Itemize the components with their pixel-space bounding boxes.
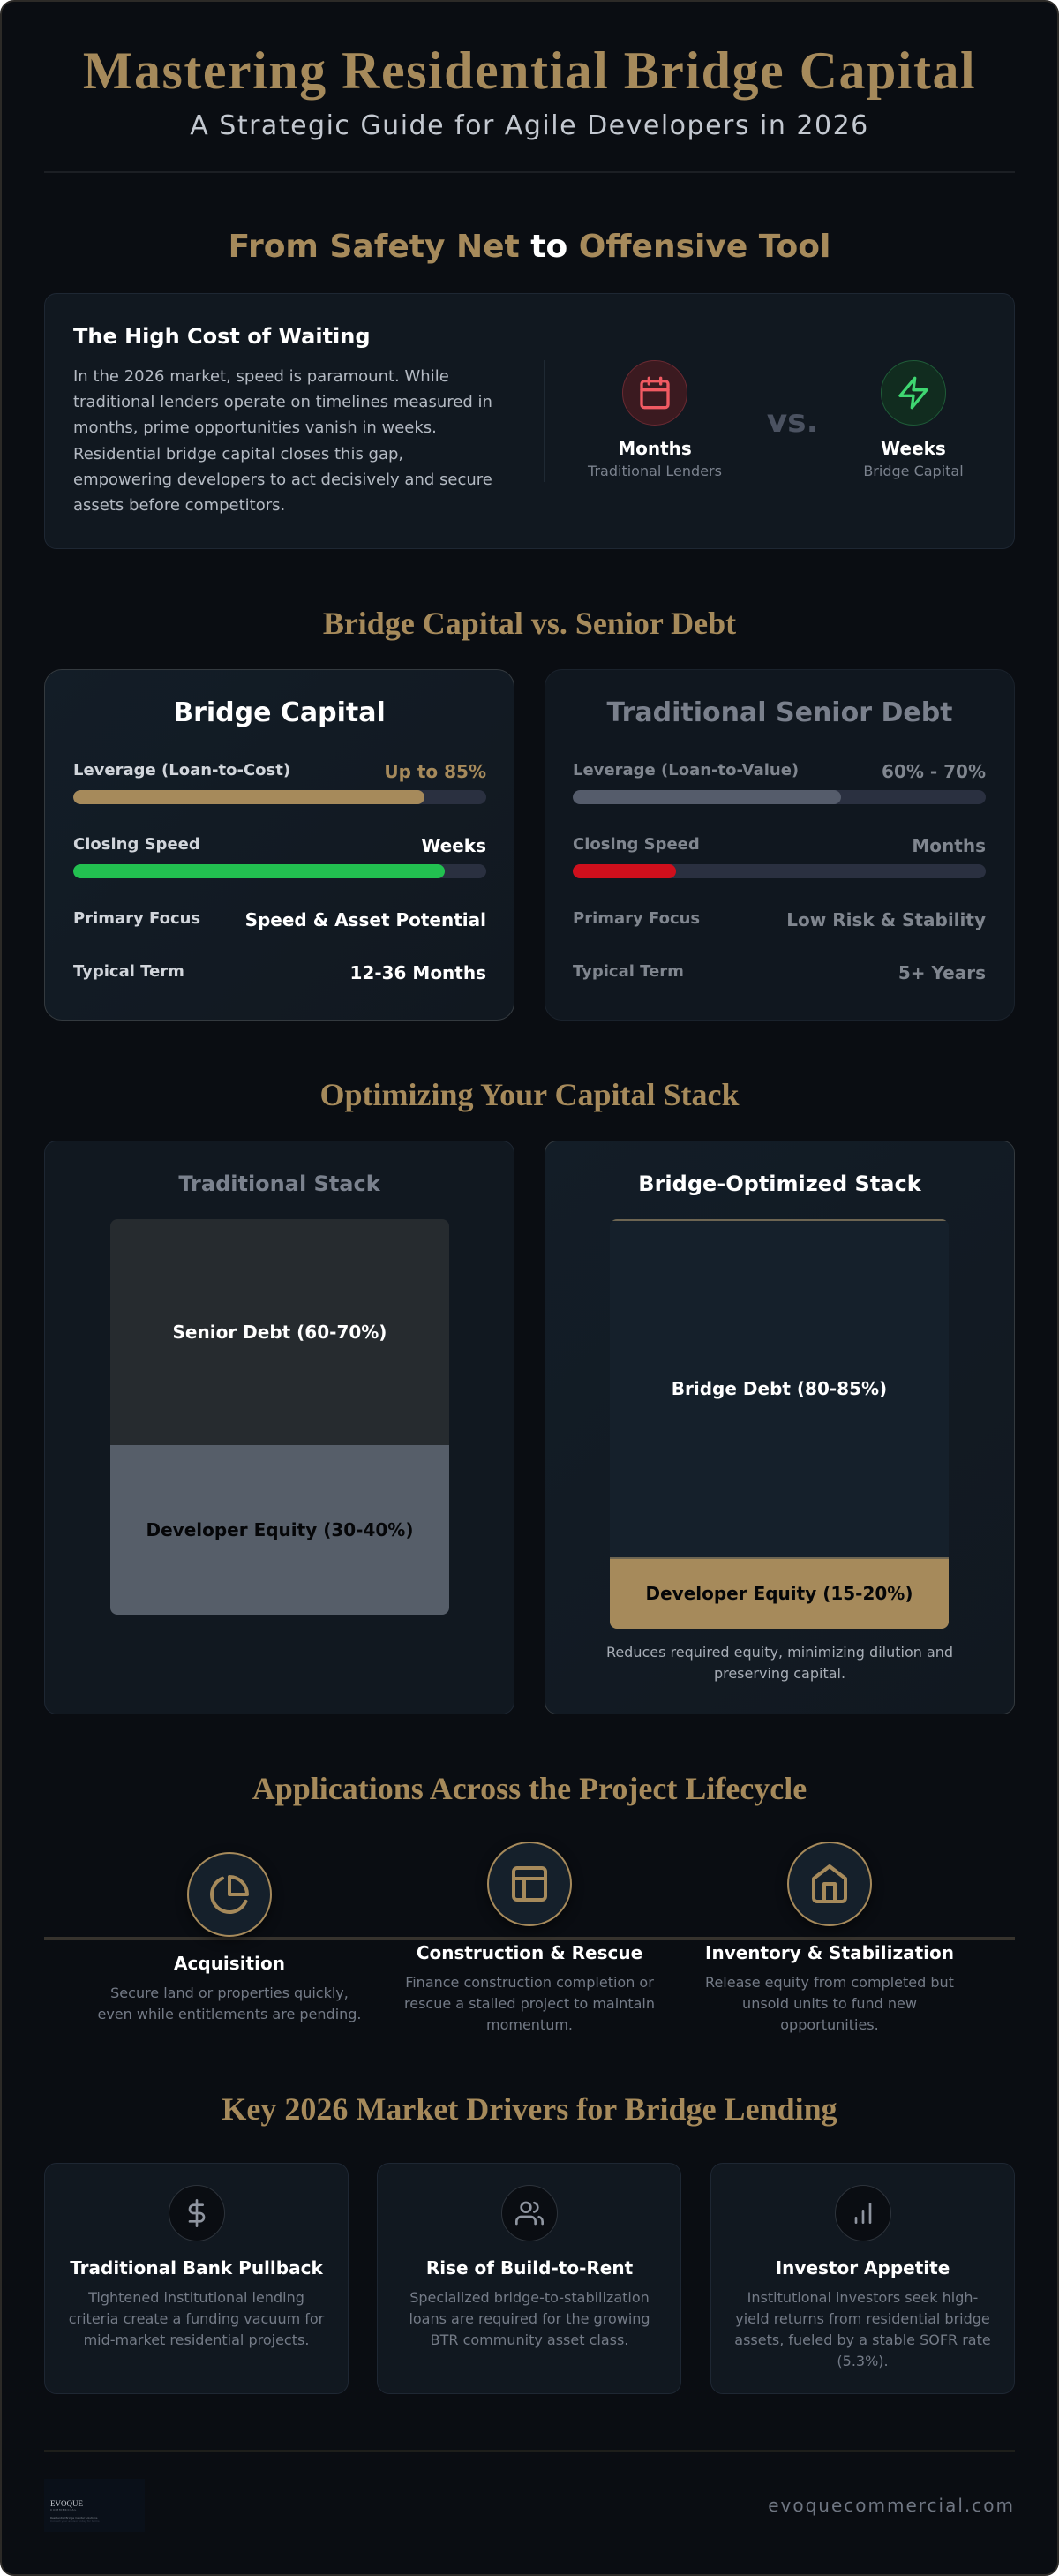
- icon: home: [787, 1842, 872, 1926]
- body text: months, prime opportunities vanish in weeks.: [73, 418, 437, 437]
- driver description: Institutional investors seek high-: [747, 2289, 978, 2306]
- typical term row: Typical Term: [73, 962, 184, 981]
- caption: preserving capital.: [714, 1665, 845, 1682]
- card heading: Traditional Senior Debt: [606, 697, 953, 728]
- segment: bridge debt: Bridge Debt (80-85%): [672, 1378, 887, 1399]
- title: Mastering Residential Bridge Capital: [83, 41, 976, 100]
- body text: [73, 367, 492, 515]
- heading: bridge capital vs senior debt: Bridge Capital vs. Senior Debt: [323, 606, 736, 641]
- segment: senior debt: Senior Debt (60-70%): [173, 1322, 387, 1343]
- logo subword: COMMERCIAL: [50, 2508, 77, 2512]
- primary focus row: Speed & Asset Potential: [245, 909, 486, 930]
- timeline: project lifecycle: [44, 1842, 1015, 2033]
- step description: Finance construction completion or: [405, 1974, 654, 1991]
- typical term row: 5+ Years: [898, 962, 986, 983]
- leverage row: [573, 761, 986, 804]
- closing speed row: [73, 835, 486, 878]
- driver description: loans are required for the growing: [409, 2310, 650, 2327]
- panel: bridge capital card: [44, 669, 514, 1021]
- panel: the high cost of waiting: [44, 293, 1015, 549]
- icon: lightning: [881, 360, 946, 426]
- typical term row: 12-36 Months: [349, 962, 486, 983]
- closing speed row: Months: [912, 835, 986, 856]
- closing speed row: Closing Speed: [573, 835, 700, 854]
- step title: Inventory & Stabilization: [705, 1942, 954, 1963]
- driver description: [409, 2289, 650, 2348]
- icon: calendar: [622, 360, 687, 426]
- card heading: Bridge Capital: [173, 697, 386, 728]
- caption: Reduces required equity, minimizing dilution and: [606, 1644, 953, 1661]
- step: construction and rescue: [404, 1842, 655, 2033]
- icon: pie chart: [187, 1852, 272, 1937]
- driver description: [69, 2289, 325, 2348]
- panel: traditional bank pullback: [44, 2163, 349, 2394]
- panel heading: The High Cost of Waiting: [73, 324, 371, 349]
- header: [83, 41, 976, 141]
- icon: bar chart: [835, 2185, 891, 2241]
- primary focus row: Primary Focus: [573, 909, 700, 928]
- driver title: Traditional Bank Pullback: [70, 2257, 323, 2278]
- step description: even while entitlements are pending.: [97, 2006, 362, 2022]
- panel: rise of build-to-rent: [377, 2163, 681, 2394]
- subtitle: A Strategic Guide for Agile Developers in 2026: [190, 110, 869, 141]
- label: weeks: Weeks: [881, 438, 946, 459]
- typical term row: [573, 962, 986, 983]
- primary focus row: [73, 909, 486, 930]
- step: acquisition: [97, 1852, 362, 2022]
- closing speed row: Closing Speed: [73, 835, 200, 854]
- step description: momentum.: [486, 2016, 573, 2033]
- driver title: Investor Appetite: [776, 2257, 950, 2278]
- step title: Construction & Rescue: [417, 1942, 642, 1963]
- segment: bridge debt: [610, 1219, 949, 1557]
- segment: senior debt: [110, 1219, 449, 1445]
- footer url: evoquecommercial.com: [768, 2495, 1015, 2516]
- leverage row: Leverage (Loan-to-Value): [573, 761, 799, 780]
- vs: vs.: [767, 403, 818, 440]
- body text: assets before competitors.: [73, 496, 285, 515]
- heading: optimizing your capital stack: Optimizing Your Capital Stack: [319, 1077, 740, 1112]
- primary focus row: Primary Focus: [73, 909, 200, 928]
- panel: investor appetite: [710, 2163, 1015, 2394]
- typical term row: [73, 962, 486, 983]
- heading: applications across the project lifecycle: Applications Across the Project Lifecycle: [252, 1771, 807, 1806]
- leverage row: Up to 85%: [384, 761, 486, 782]
- heading: from safety net to offensive tool: From Safety Net to Offensive Tool: [229, 229, 830, 265]
- leverage row: [73, 761, 486, 804]
- driver description: yield returns from residential bridge: [735, 2310, 990, 2327]
- label: months: Months: [618, 438, 692, 459]
- driver description: criteria create a funding vacuum for: [69, 2310, 324, 2327]
- label: bridge capital: Bridge Capital: [863, 463, 964, 479]
- driver title: Rise of Build-to-Rent: [426, 2257, 633, 2278]
- driver description: Tightened institutional lending: [88, 2289, 304, 2306]
- caption: [606, 1644, 953, 1682]
- step description: Secure land or properties quickly,: [110, 1985, 349, 2001]
- panel: traditional stack: [44, 1141, 514, 1714]
- segment: developer equity: Developer Equity (15-20%): [646, 1583, 913, 1604]
- logo: [44, 2479, 145, 2532]
- icon: users: [501, 2185, 558, 2241]
- leverage row: 60% - 70%: [882, 761, 986, 782]
- step description: [97, 1985, 362, 2022]
- logo wordmark: EVOQUE: [50, 2499, 83, 2508]
- panel: traditional senior debt card: [545, 669, 1015, 1021]
- leverage row: Leverage (Loan-to-Cost): [73, 761, 290, 780]
- stack heading: Traditional Stack: [178, 1171, 380, 1196]
- step description: unsold units to fund new: [742, 1995, 917, 2012]
- body text: In the 2026 market, speed is paramount. While: [73, 367, 449, 386]
- step description: opportunities.: [780, 2016, 879, 2033]
- body text: traditional lenders operate on timelines measured in: [73, 393, 492, 411]
- step description: [705, 1974, 954, 2033]
- typical term row: Typical Term: [573, 962, 684, 981]
- step description: rescue a stalled project to maintain: [404, 1995, 655, 2012]
- primary focus row: Low Risk & Stability: [786, 909, 986, 930]
- driver description: BTR community asset class.: [431, 2331, 628, 2348]
- driver description: Specialized bridge-to-stabilization: [409, 2289, 650, 2306]
- driver description: assets, fueled by a stable SOFR rate: [734, 2331, 991, 2348]
- stack chart: [110, 1219, 449, 1615]
- closing speed row: [573, 835, 986, 878]
- stack heading: Bridge-Optimized Stack: [638, 1171, 921, 1196]
- icon: layout: [487, 1842, 572, 1926]
- heading: key market drivers: Key 2026 Market Drivers for Bridge Lending: [222, 2091, 837, 2127]
- segment: developer equity: [610, 1557, 949, 1629]
- driver description: (5.3%).: [837, 2353, 889, 2369]
- step: inventory and stabilization: [705, 1842, 954, 2033]
- body text: empowering developers to act decisively and secure: [73, 471, 492, 489]
- primary focus row: [573, 909, 986, 930]
- logo tagline: Residential Bridge Capital Solutions: [50, 2516, 97, 2520]
- logo contact: Contact your advisor today for terms: [50, 2520, 100, 2523]
- closing speed row: Weeks: [421, 835, 486, 856]
- segment: developer equity: Developer Equity (30-40%): [146, 1519, 413, 1540]
- driver description: [734, 2289, 991, 2369]
- step description: [404, 1974, 655, 2033]
- panel: bridge-optimized stack: [545, 1141, 1015, 1714]
- icon: dollar sign: [168, 2185, 224, 2241]
- segment: developer equity: [110, 1445, 449, 1615]
- step title: Acquisition: [174, 1953, 285, 1974]
- step description: Release equity from completed but: [705, 1974, 954, 1991]
- body text: Residential bridge capital closes this gap,: [73, 445, 403, 463]
- driver description: mid-market residential projects.: [84, 2331, 309, 2348]
- stack chart: [610, 1219, 949, 1629]
- label: traditional lenders: Traditional Lenders: [588, 463, 722, 479]
